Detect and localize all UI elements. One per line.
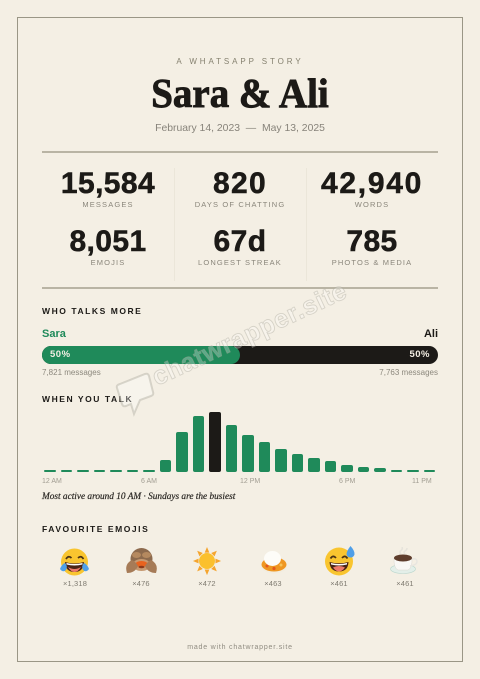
count: hot beverage: ×461 [396,579,414,588]
emoji: tears of joy [60,548,89,576]
activity caption: Most active around 10 AM · Sundays are the busiest [42,492,235,502]
stat: longest streak: LONGEST STREAK [198,258,282,266]
count: curry rice: ×463 [264,579,282,588]
tick: 6 AM: 6 AM [141,478,157,485]
heading: when you talk: WHEN YOU TALK [42,394,133,404]
stat: days of chatting [195,166,285,208]
top divider [42,151,438,153]
tick: 12 AM: 12 AM [42,478,62,485]
lower divider [42,287,438,289]
emoji: sun [193,547,221,575]
eyebrow: A WHATSAPP STORY [176,56,304,66]
stat: messages: 15,584 [61,166,155,200]
count: sun: ×472 [198,579,216,588]
emoji: speak no evil monkey [126,548,157,573]
watermark speech bubble [117,374,153,414]
stat: longest streak: 67d [214,224,266,258]
stat: words: 42,940 [321,166,423,200]
share bar [42,346,438,364]
count: sweat grin: ×461 [330,579,348,588]
stat: messages: MESSAGES [82,200,134,208]
stat: emojis: 8,051 [69,224,147,258]
stat: words: WORDS [355,200,389,208]
tick: 12 PM: 12 PM [240,478,260,485]
stat: longest streak [198,224,282,266]
tick: 11 PM: 11 PM [412,478,432,485]
heading: who talks more: WHO TALKS MORE [42,306,142,316]
watermark text: chatwrapper.site [148,277,351,391]
emoji: curry rice [262,551,286,572]
emoji: hot beverage [390,547,418,574]
name: Ali: Ali [424,328,438,340]
name: Sara: Sara [42,328,66,340]
count: monkey: ×476 [132,579,150,588]
stat: photos and media [332,224,412,266]
hourly bar chart [44,412,435,472]
heading: favourite emojis: FAVOURITE EMOJIS [42,524,149,534]
stat: photos and media: PHOTOS & MEDIA [332,258,412,266]
stat: photos and media: 785 [346,224,398,258]
Sara share [42,346,240,364]
tick: 6 PM: 6 PM [339,478,355,485]
count: tears of joy: ×1,318 [63,579,87,588]
title: Sara & Ali [151,70,329,116]
Sara percent: 50% [50,349,71,360]
Ali messages: 7,763 messages [379,368,438,376]
Ali percent: 50% [409,349,430,360]
stat: emojis: EMOJIS [91,258,125,266]
date range: February 14, 2023 — May 13, 2025 [155,123,325,134]
emoji: grinning with sweat [325,546,354,576]
Sara messages: 7,821 messages [42,368,101,376]
stat: days of chatting: 820 [213,166,267,200]
footer: made with chatwrapper.site [187,644,293,651]
stat: days of chatting: DAYS OF CHATTING [195,200,285,208]
stats grid [61,166,423,281]
